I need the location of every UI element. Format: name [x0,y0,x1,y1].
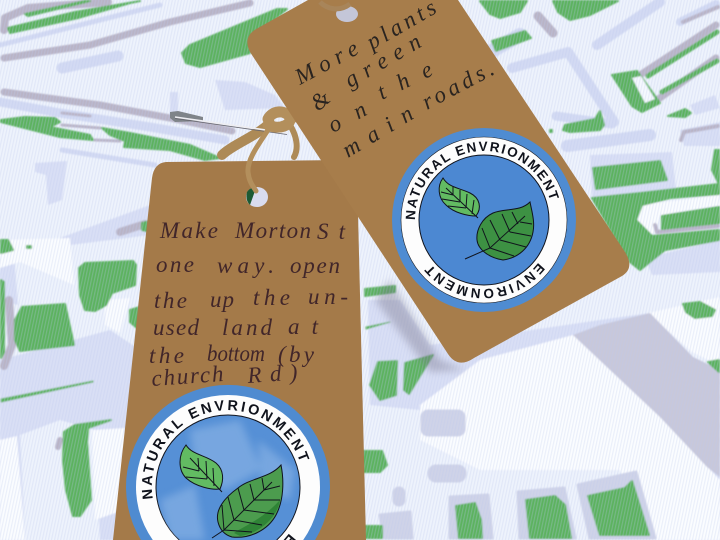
handwriting: church [151,361,224,391]
handwriting: the [253,285,290,310]
tag body [247,0,629,363]
twine loop behind the left tag [222,122,297,157]
handwriting: Make [159,218,218,243]
tag shadow on the cloth [375,280,465,372]
badge: natural environment [392,128,576,312]
badge: natural environment [126,384,330,540]
handwriting: way. [217,253,274,278]
left luggage tag [113,160,366,540]
handwriting: green [340,29,425,92]
weave-toned lilac blocks [380,411,655,538]
handwriting [149,218,348,391]
white map blocks [0,195,720,540]
large leaf [212,465,283,538]
tag body [113,160,366,540]
handwriting: main [338,101,417,162]
handwriting: open [290,253,340,278]
small leaf [180,445,223,492]
handwriting: at [288,314,319,339]
handwriting: (by [278,342,315,367]
handwriting [290,0,498,162]
white hole inside the green triangle [632,76,655,103]
handwriting: More [290,35,362,90]
tag hole [246,187,268,207]
twine through hole [320,2,350,9]
badge ring text: NATURAL ENVRIONMENT [406,142,559,220]
handwriting: Morton [234,218,311,243]
handwriting: St [317,219,346,244]
badge: natural environment: ENVIRONMENT [424,263,545,298]
handwriting: un- [308,284,348,309]
large leaf [465,202,534,260]
handwriting: roads. [418,56,498,114]
right luggage tag [247,0,630,363]
handwriting: used [153,315,200,340]
handwriting: one [156,252,194,277]
handwriting: on [324,97,371,137]
tag hole [336,6,358,22]
handwriting: bottom [207,341,265,366]
handwriting: & [305,85,335,116]
small leaf [439,178,479,218]
handwriting: up [210,287,234,312]
badge ring text: NATURAL ENVRIONMENT [142,400,310,499]
twine knot [248,112,302,191]
handwriting: the [154,288,187,313]
handwriting: the [149,343,184,368]
grey roads [573,313,720,477]
handwriting: land [222,315,272,340]
handwriting: the [373,57,436,104]
handwriting: Rd) [246,360,298,388]
safety pin [170,111,287,134]
